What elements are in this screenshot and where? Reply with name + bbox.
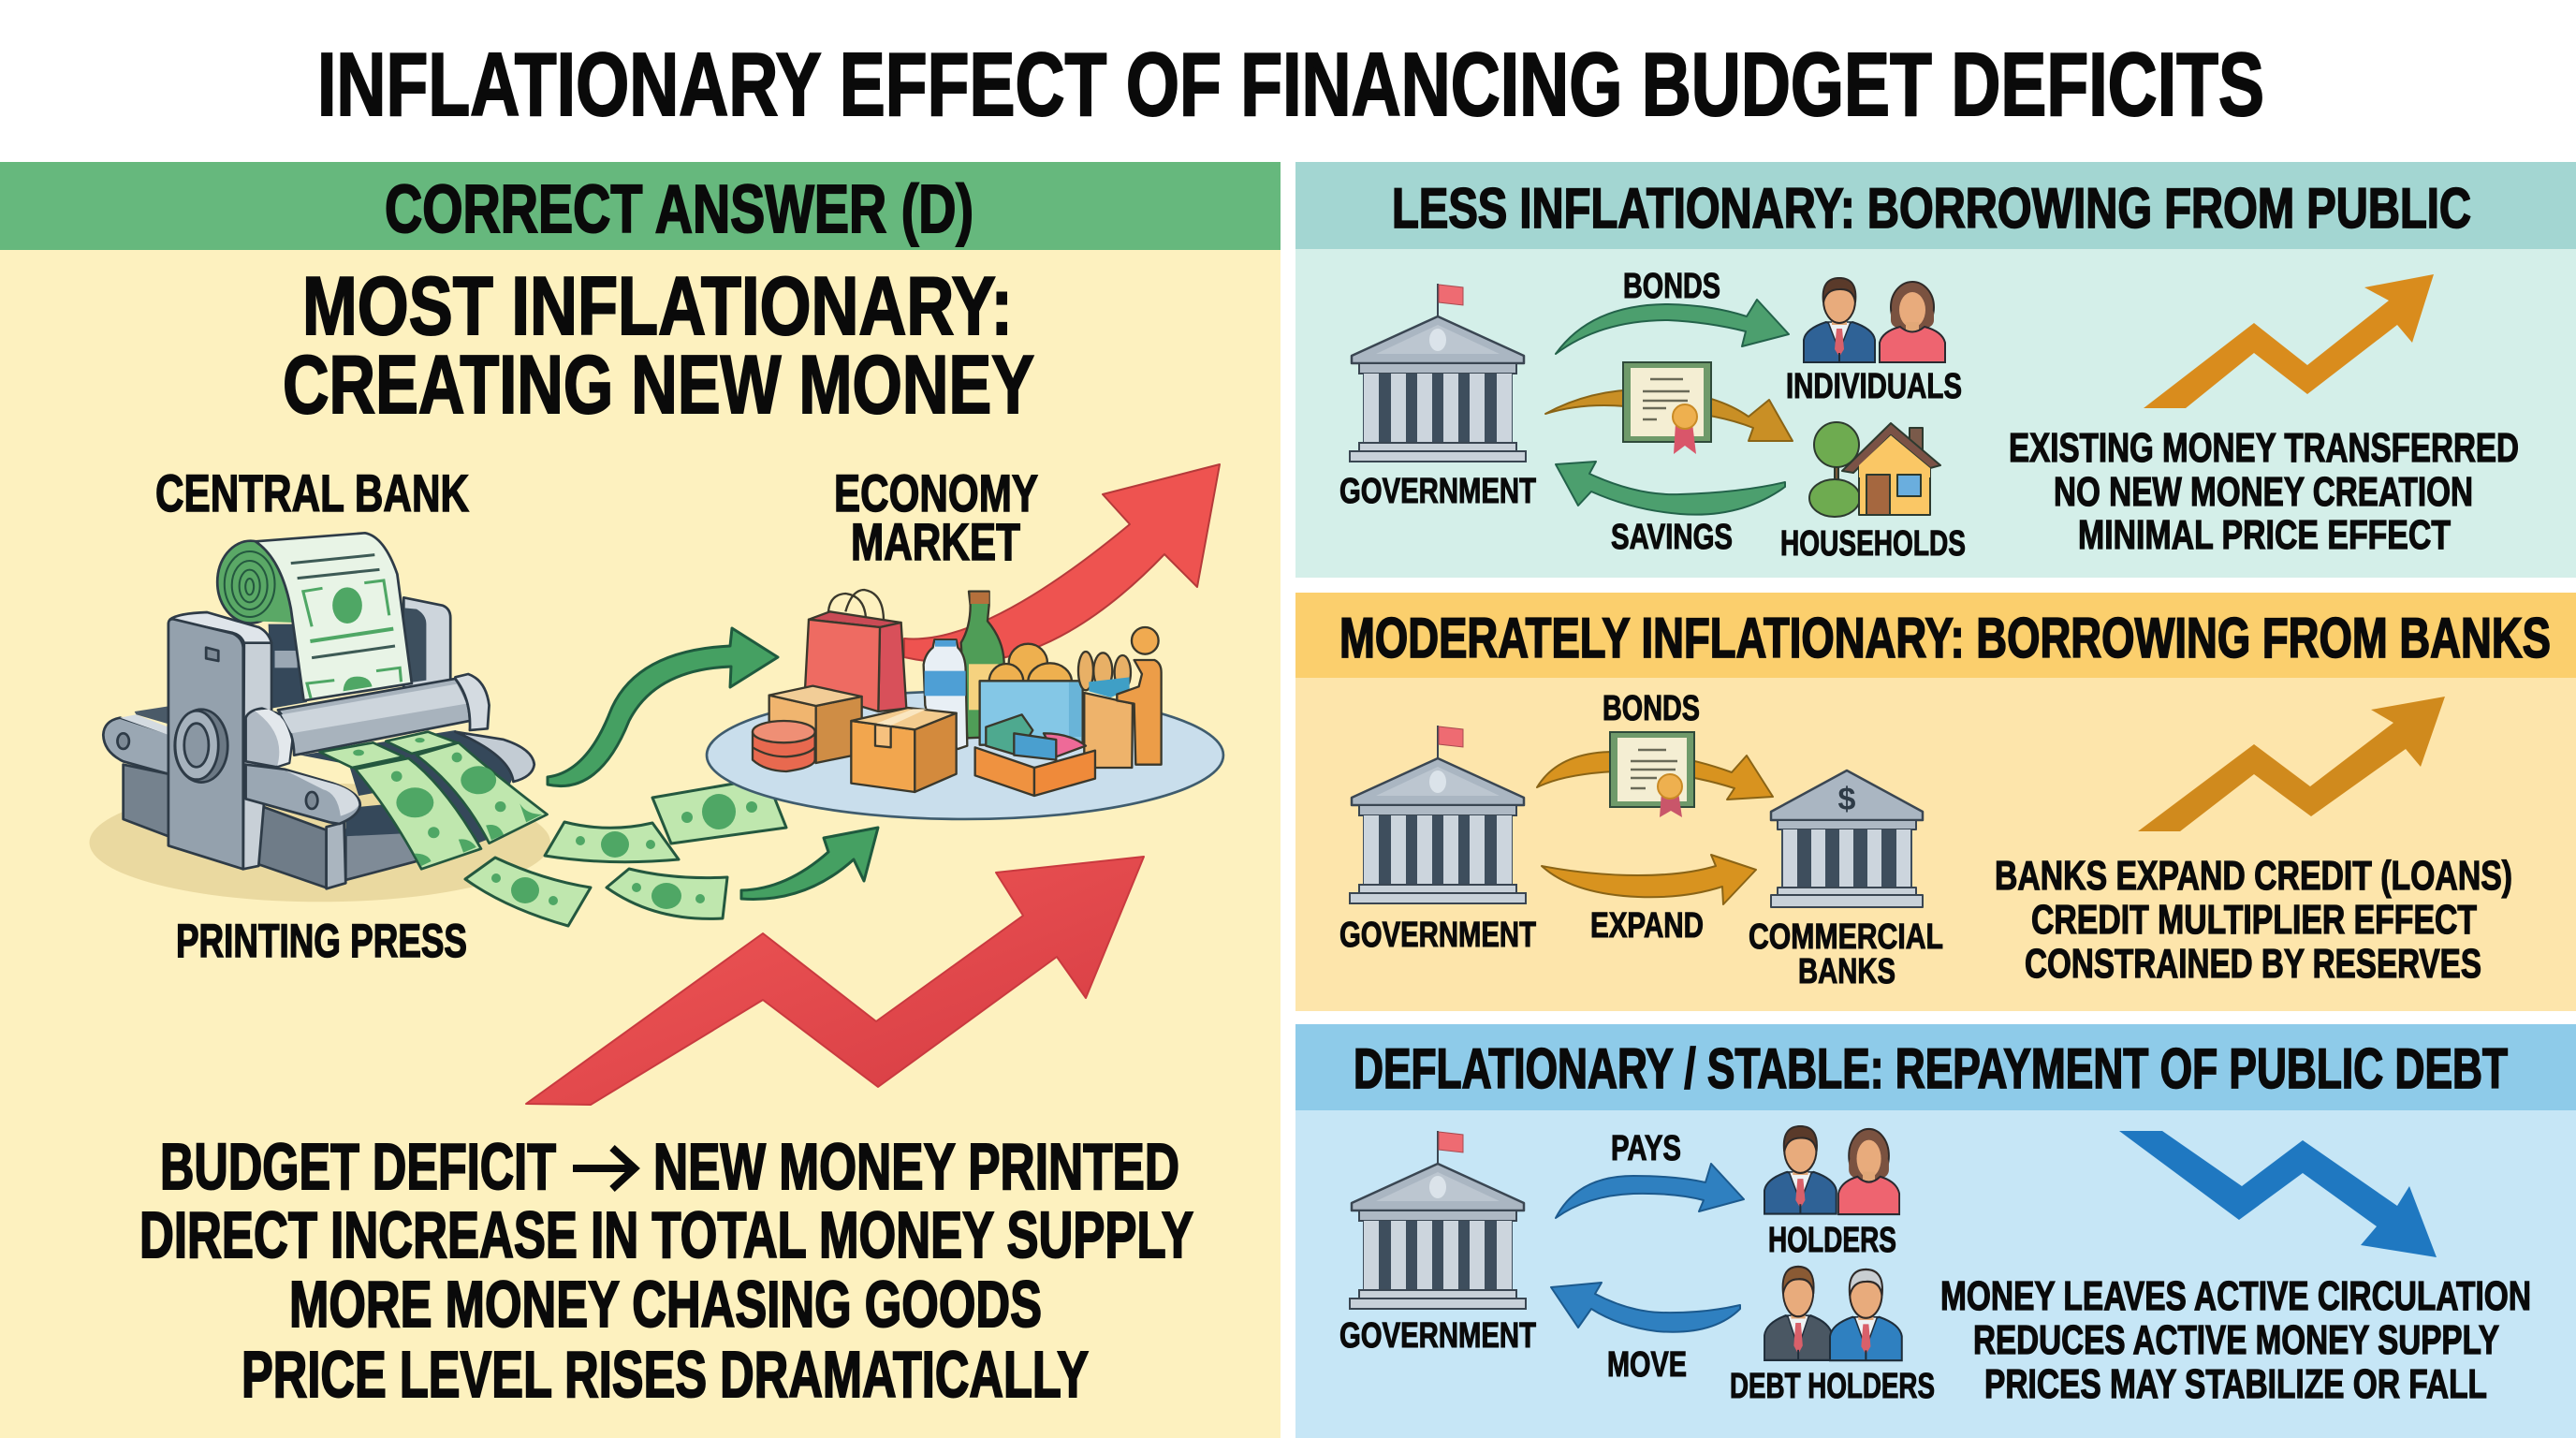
label: printing press: PRINTING PRESS xyxy=(176,915,467,967)
panel: less inflationary xyxy=(1295,162,2576,578)
left panel explanation text xyxy=(139,1130,1193,1411)
left panel explanation text: PRICE LEVEL RISES DRAMATICALLY xyxy=(242,1338,1089,1411)
banknote xyxy=(465,858,591,926)
label: economy market: MARKET xyxy=(851,512,1020,571)
icon: printing press xyxy=(89,533,550,902)
banknote xyxy=(652,778,786,844)
panel: most inflationary xyxy=(0,162,1281,1438)
arrow: big red rising trend xyxy=(526,857,1144,1105)
panel header xyxy=(1295,1024,2576,1110)
label: move: MOVE xyxy=(1607,1345,1687,1385)
arrow: moderate upward trend xyxy=(2144,274,2434,408)
label: pays: PAYS xyxy=(1611,1129,1681,1168)
icon: bond certificate xyxy=(1623,362,1711,454)
label: commercial banks: BANKS xyxy=(1798,952,1895,991)
label: economy market xyxy=(834,463,1038,571)
label: bonds: BONDS xyxy=(1623,267,1720,306)
icon: commercial bank xyxy=(1771,770,1923,907)
text: less inflationary effects: MINIMAL PRICE EFFECT xyxy=(2078,512,2451,558)
left panel explanation text: MORE MONEY CHASING GOODS xyxy=(289,1268,1042,1341)
label: central bank: CENTRAL BANK xyxy=(155,463,469,522)
icon: government building xyxy=(1350,726,1526,903)
left panel explanation text: NEW MONEY PRINTED xyxy=(653,1130,1179,1203)
label: economy market: ECONOMY xyxy=(834,463,1038,522)
left panel explanation text: BUDGET DEFICIT xyxy=(160,1130,556,1203)
arrow: savings to government xyxy=(1556,462,1785,515)
label: debt holders: DEBT HOLDERS xyxy=(1730,1367,1935,1406)
text: less inflationary effects xyxy=(2009,425,2519,558)
icon: holders xyxy=(1764,1126,1899,1214)
panel: moderately inflationary xyxy=(1295,593,2576,1011)
label: savings: SAVINGS xyxy=(1611,518,1733,557)
arrow: pays holders xyxy=(1556,1164,1744,1218)
left panel heading: MOST INFLATIONARY: xyxy=(302,259,1013,352)
label: holders: HOLDERS xyxy=(1768,1221,1896,1260)
icon: government building xyxy=(1350,284,1526,462)
left panel header: CORRECT ANSWER (D) xyxy=(385,172,973,247)
arrow: bonds to banks xyxy=(1537,752,1773,800)
arrow: press to market lower xyxy=(741,828,878,899)
arrow: rising prices behind market xyxy=(904,464,1220,663)
arrow: moderate upward trend xyxy=(2138,697,2445,831)
arrow: expand credit xyxy=(1542,855,1756,904)
icon: commercial bank: $ xyxy=(1838,782,1856,817)
arrow: debt moves back xyxy=(1551,1283,1740,1332)
icon: flying banknotes xyxy=(465,778,786,926)
left panel heading xyxy=(283,259,1034,431)
left panel header xyxy=(0,162,1281,250)
left panel explanation text: DIRECT INCREASE IN TOTAL MONEY SUPPLY xyxy=(139,1198,1193,1271)
left panel heading: CREATING NEW MONEY xyxy=(283,338,1034,431)
arrow: bonds to households xyxy=(1545,389,1793,441)
icon: bond certificate xyxy=(1610,732,1694,817)
label: households: HOUSEHOLDS xyxy=(1780,524,1966,564)
label: commercial banks: COMMERCIAL xyxy=(1749,917,1943,957)
panel: deflationary or stable xyxy=(1295,1024,2576,1438)
panel header xyxy=(1295,162,2576,249)
arrow: downward trend xyxy=(2119,1131,2437,1257)
arrow: bonds to individuals xyxy=(1556,300,1789,354)
icon: debt holders xyxy=(1764,1267,1902,1360)
label: expand: EXPAND xyxy=(1590,906,1704,946)
label: bonds: BONDS xyxy=(1603,689,1700,728)
label: commercial banks xyxy=(1749,917,1943,991)
label: government: GOVERNMENT xyxy=(1339,472,1536,511)
icon: government building xyxy=(1350,1131,1526,1309)
label: individuals: INDIVIDUALS xyxy=(1786,367,1962,406)
icon: market goods on platter xyxy=(707,590,1223,819)
banknote xyxy=(607,869,727,918)
icon: individuals xyxy=(1804,278,1945,362)
banknote xyxy=(545,822,679,862)
text: moderately inflationary effects xyxy=(1995,853,2512,987)
label: government: GOVERNMENT xyxy=(1339,1316,1536,1356)
label: government: GOVERNMENT xyxy=(1339,916,1536,955)
icon: household xyxy=(1809,422,1940,517)
text: deflationary effects xyxy=(1940,1273,2531,1407)
arrow: press to market upper xyxy=(548,628,778,786)
